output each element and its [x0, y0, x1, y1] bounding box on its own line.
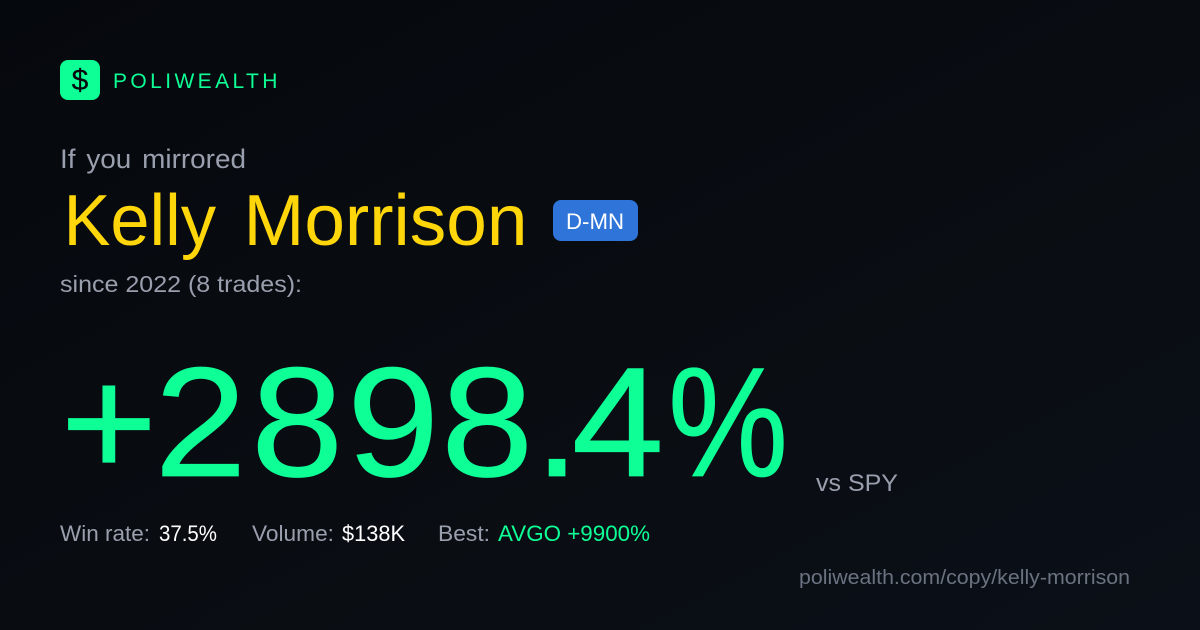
stat: volume: Volume:: [252, 521, 334, 546]
benchmark label: vs SPY: [816, 470, 898, 497]
stat: volume: [252, 521, 405, 546]
politician name: [64, 181, 528, 261]
politician name: Kelly: [64, 181, 216, 261]
icon: dollar badge: [60, 60, 100, 100]
logo: [60, 60, 281, 100]
party badge: D-MN: [566, 209, 624, 234]
party badge: [553, 200, 638, 241]
stat: win rate: 37.5%: [159, 521, 217, 546]
headline return: %: [668, 335, 788, 509]
stat: best trade: AVGO +9900%: [498, 521, 650, 546]
headline return: +2898.4: [60, 336, 664, 510]
footer url: poliwealth.com/copy/kelly-morrison: [799, 567, 1130, 589]
politician name: Morrison: [244, 181, 528, 261]
icon: dollar badge: $: [72, 64, 89, 97]
stats row: [60, 521, 650, 546]
stat: volume: $138K: [342, 521, 405, 546]
stat: best trade: Best:: [438, 521, 490, 546]
brand name: POLIWEALTH: [113, 70, 281, 93]
stat: win rate: [60, 521, 217, 546]
intro line: If you mirrored: [60, 144, 246, 174]
stat: win rate: Win rate:: [60, 521, 150, 546]
period and trade count: since 2022 (8 trades):: [60, 271, 302, 297]
